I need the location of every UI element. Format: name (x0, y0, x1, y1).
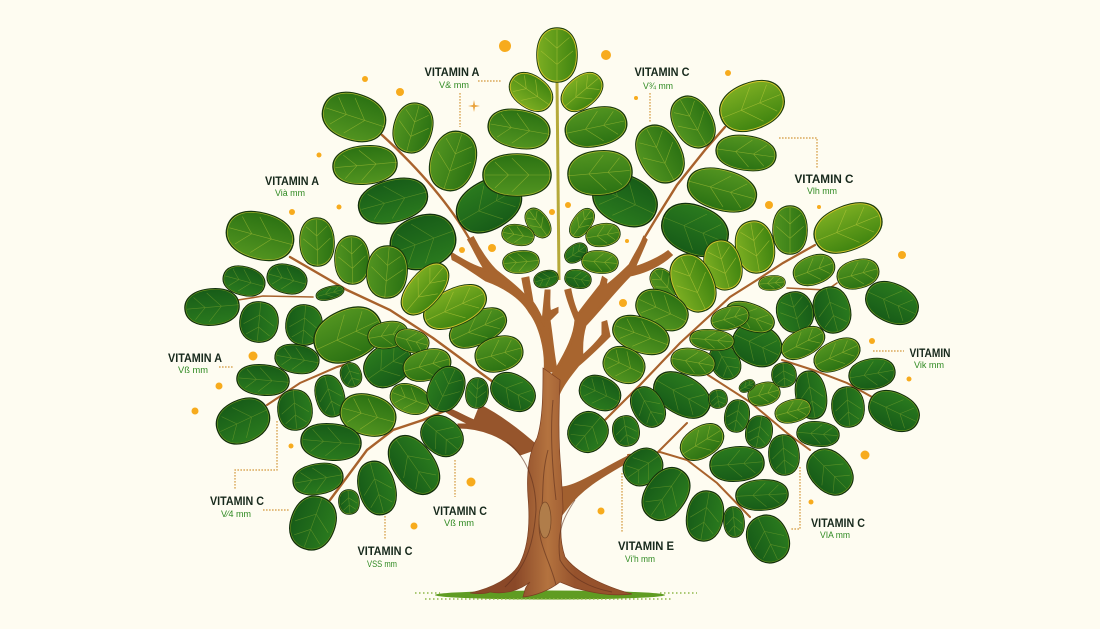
label: vitamin right (910, 346, 950, 370)
label: vitamin right: VITAMIN (910, 346, 950, 360)
tree trunk and main limbs (446, 238, 671, 597)
label: vitamin C bottom: VSS mm (367, 559, 397, 569)
label: vitamin E bottom: VITAMIN E (618, 539, 674, 553)
label: vitamin C bottom: VITAMIN C (358, 544, 413, 558)
label: vitamin A top: V& mm (439, 80, 469, 90)
sparkle (468, 100, 480, 112)
thin branches (238, 127, 872, 517)
label: vitamin C lower centre: Vß mm (444, 518, 474, 528)
central stem (557, 80, 559, 280)
label: vitamin A left: Vß mm (178, 365, 208, 375)
leaf cluster: left lower middle (210, 256, 541, 451)
leaf cluster: right middle (645, 194, 925, 337)
label: vitamin C lower left: V⁄4 mm (221, 509, 251, 519)
dotted connector lines (219, 81, 904, 540)
label: vitamin C lower left (210, 494, 264, 519)
leaf cluster: centre small inner (501, 204, 622, 290)
grass ground (415, 590, 697, 600)
label: vitamin C lower right: VIA mm (820, 530, 850, 540)
leaf cluster: left middle dark backing (184, 167, 530, 346)
label: vitamin A upper left: Vià mm (275, 188, 305, 198)
label: vitamin C top (634, 65, 690, 91)
label: vitamin A upper left (265, 174, 319, 198)
label: vitamin C upper right (794, 172, 854, 196)
label: vitamin right: Vik mm (914, 360, 944, 370)
label: vitamin A left: VITAMIN A (168, 351, 222, 365)
leaf cluster: left bottom (283, 408, 470, 556)
orange dots (192, 40, 912, 530)
label: vitamin C upper right: VITAMIN C (794, 172, 854, 186)
label: vitamin C lower left: VITAMIN C (210, 494, 264, 508)
leaf cluster: right lower middle (561, 282, 925, 503)
label: vitamin E bottom: Vi'h mm (625, 554, 655, 564)
label: vitamin A upper left: VITAMIN A (265, 174, 319, 188)
leaf cluster: centre top (483, 28, 665, 236)
label: vitamin C top: V¾ mm (643, 81, 673, 91)
label: vitamin C lower centre: VITAMIN C (433, 504, 487, 518)
label: vitamin A left (168, 351, 222, 375)
label: vitamin A top (424, 65, 480, 90)
leaf cluster: upper left (316, 85, 483, 230)
leaf cluster: right bottom (617, 417, 796, 569)
label: vitamin C top: VITAMIN C (634, 65, 690, 79)
label: vitamin C upper right: Vlh mm (807, 186, 837, 196)
label: vitamin C lower centre (433, 504, 487, 528)
label: vitamin C bottom (358, 544, 413, 569)
label: vitamin C lower right: VITAMIN C (811, 516, 865, 530)
label: vitamin E bottom (618, 539, 674, 564)
label: vitamin C lower right (811, 516, 865, 540)
label: vitamin A top: VITAMIN A (424, 65, 480, 79)
leaf cluster: upper right (627, 72, 791, 265)
